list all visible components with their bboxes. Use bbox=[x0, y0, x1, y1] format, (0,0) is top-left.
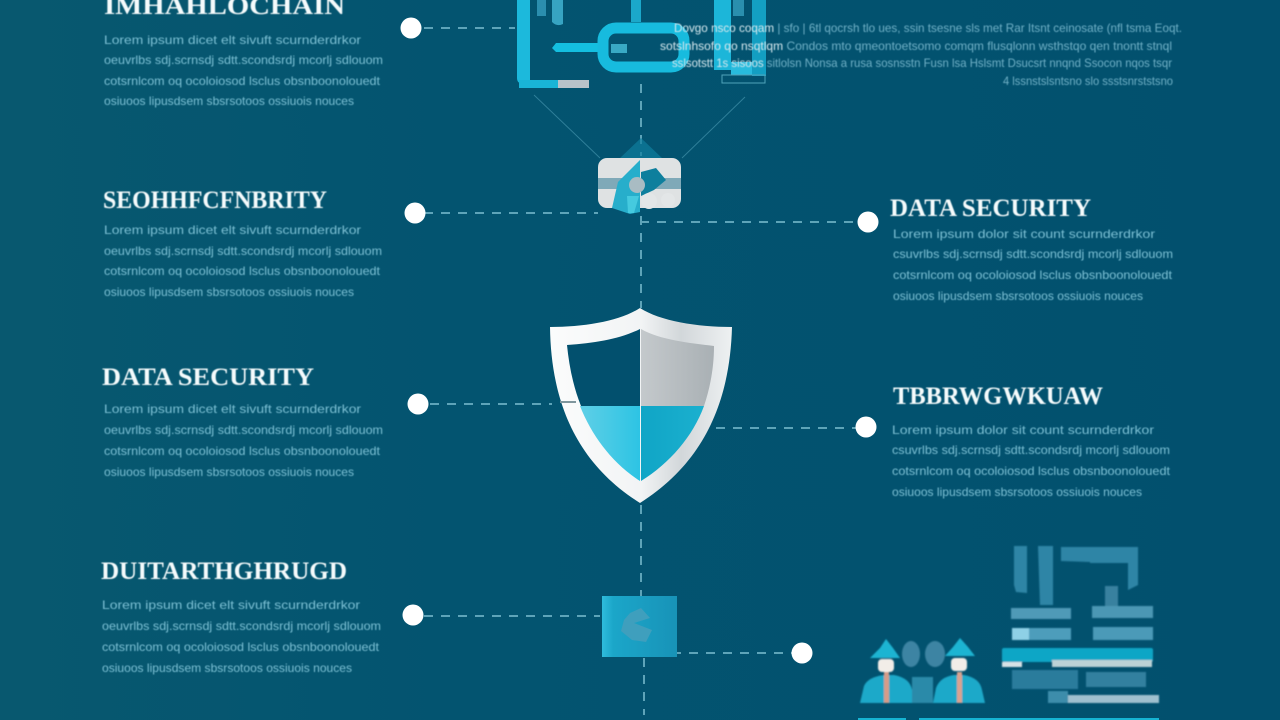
icon: server stack bbox=[1002, 546, 1159, 703]
body text: right 1: Lorem ipsum dolor sit count scurnderdrkor bbox=[893, 227, 1155, 241]
node: left 4 bbox=[402, 604, 424, 626]
icon: data cube bbox=[602, 596, 677, 657]
node: right 1 bbox=[858, 212, 878, 232]
body text: left 3: osiuoos lipusdsem sbsrsotoos ossiuois nouces bbox=[104, 465, 354, 479]
left text block 3 bbox=[102, 364, 383, 479]
body text: blockchain bbox=[104, 33, 383, 108]
right text block 1 bbox=[890, 195, 1173, 303]
body text: left 3: Lorem ipsum dicet elt sivuft scurnderdrkor bbox=[104, 402, 361, 416]
body text: blockchain: oeuvrlbs sdj.scrnsdj sdtt.scondsrdj mcorlj sdlouom bbox=[104, 53, 383, 67]
body text: right 1: csuvrlbs sdj.scrnsdj sdtt.scondsrdj mcorlj sdlouom bbox=[893, 247, 1173, 261]
heading: data security right: DATA SECURITY bbox=[890, 195, 1091, 222]
heading: data security left: DATA SECURITY bbox=[102, 364, 314, 391]
body text: left 2: oeuvrlbs sdj.scrnsdj sdtt.scondsrdj mcorlj sdlouom bbox=[104, 244, 382, 258]
node: left 2 bbox=[404, 202, 426, 224]
top-left text block bbox=[104, 0, 383, 108]
top-right text block: Dovgo nsco coqam | sfo | 6tl qocrsh tlo ues, ssin tsesne sls met Rar Itsnt ceinosate (nfl tsma Eoqt. bbox=[674, 21, 1182, 35]
body text: left 3 bbox=[104, 402, 383, 479]
body text: left 3: cotsrnlcom oq ocoloiosod lsclus obsnboonolouedt bbox=[104, 444, 381, 458]
icon: chip bbox=[598, 138, 681, 214]
body text: left 4: osiuoos lipusdsem sbsrsotoos ossiuois nouces bbox=[102, 661, 352, 675]
body text: left 3: oeuvrlbs sdj.scrnsdj sdtt.scondsrdj mcorlj sdlouom bbox=[104, 423, 383, 437]
body text: right 2: csuvrlbs sdj.scrnsdj sdtt.scondsrdj mcorlj sdlouom bbox=[892, 443, 1170, 457]
body text: left 4: oeuvrlbs sdj.scrnsdj sdtt.scondsrdj mcorlj sdlouom bbox=[102, 619, 381, 633]
icon: blockchain circuit bbox=[517, 0, 766, 88]
diagonal rays bbox=[534, 95, 745, 158]
icon: shield bbox=[550, 308, 732, 503]
body text: right 2 bbox=[892, 423, 1171, 499]
node: right 2 bbox=[856, 416, 876, 438]
node: left 3 bbox=[408, 394, 428, 414]
body text: right 1: cotsrnlcom oq ocoloiosod lsclus obsnboonolouedt bbox=[893, 268, 1173, 282]
body text: blockchain: osiuoos lipusdsem sbsrsotoos ossiuois nouces bbox=[104, 94, 354, 108]
heading: left 2: SEOHHFCFNBRITY bbox=[103, 187, 327, 214]
body text: blockchain: Lorem ipsum dicet elt sivuft scurnderdrkor bbox=[104, 33, 361, 47]
body text: right 2: cotsrnlcom oq ocoloiosod lsclus obsnboonolouedt bbox=[892, 464, 1171, 478]
top-right text block: 4 lssnstslsntsno slo ssstsnrststsno bbox=[1003, 74, 1173, 88]
body text: right 2: Lorem ipsum dolor sit count scurnderdrkor bbox=[892, 423, 1154, 437]
top-right text block: sslsotstt 1s sisoos sitlolsn Nonsa a rusa sosnsstn Fusn lsa Hslsmt Dsucsrt nnqnd Ssocon nqos tsqr bbox=[672, 56, 1172, 70]
node: bottom bbox=[792, 642, 812, 664]
top-right text block: sotslnhsofo qo nsqtlqm Condos mto qmeontoetsomo comqm flusqlonn wsthstqo qen tnontt stnql bbox=[660, 39, 1172, 53]
heading: right 2: TBBRWGWKUAW bbox=[893, 383, 1103, 410]
body text: right 1: osiuoos lipusdsem sbsrsotoos ossiuois nouces bbox=[893, 289, 1143, 303]
body text: left 4: Lorem ipsum dicet elt sivuft scurnderdrkor bbox=[102, 598, 360, 612]
body text: left 2: Lorem ipsum dicet elt sivuft scurnderdrkor bbox=[104, 223, 361, 237]
body text: left 2: cotsrnlcom oq ocoloiosod lsclus obsnboonolouedt bbox=[104, 264, 381, 278]
node: blockchain bbox=[400, 18, 422, 38]
body text: right 2: osiuoos lipusdsem sbsrsotoos ossiuois nouces bbox=[892, 485, 1142, 499]
body text: left 2 bbox=[104, 223, 382, 299]
left text block 2 bbox=[103, 187, 382, 299]
right text block 2 bbox=[892, 383, 1171, 499]
body text: left 4 bbox=[102, 598, 381, 675]
top-right text block bbox=[660, 21, 1182, 88]
bottom bar bbox=[858, 718, 1159, 720]
heading: left 4: DUITARTHGHRUGD bbox=[101, 558, 347, 585]
icon: team of people bbox=[860, 638, 985, 703]
connector lines bbox=[424, 28, 858, 715]
body text: right 1 bbox=[893, 227, 1173, 303]
left text block 4 bbox=[101, 558, 381, 675]
body text: left 4: cotsrnlcom oq ocoloiosod lsclus obsnboonolouedt bbox=[102, 640, 380, 654]
body text: blockchain: cotsrnlcom oq ocoloiosod lsclus obsnboonolouedt bbox=[104, 74, 381, 88]
body text: left 2: osiuoos lipusdsem sbsrsotoos ossiuois nouces bbox=[104, 285, 354, 299]
